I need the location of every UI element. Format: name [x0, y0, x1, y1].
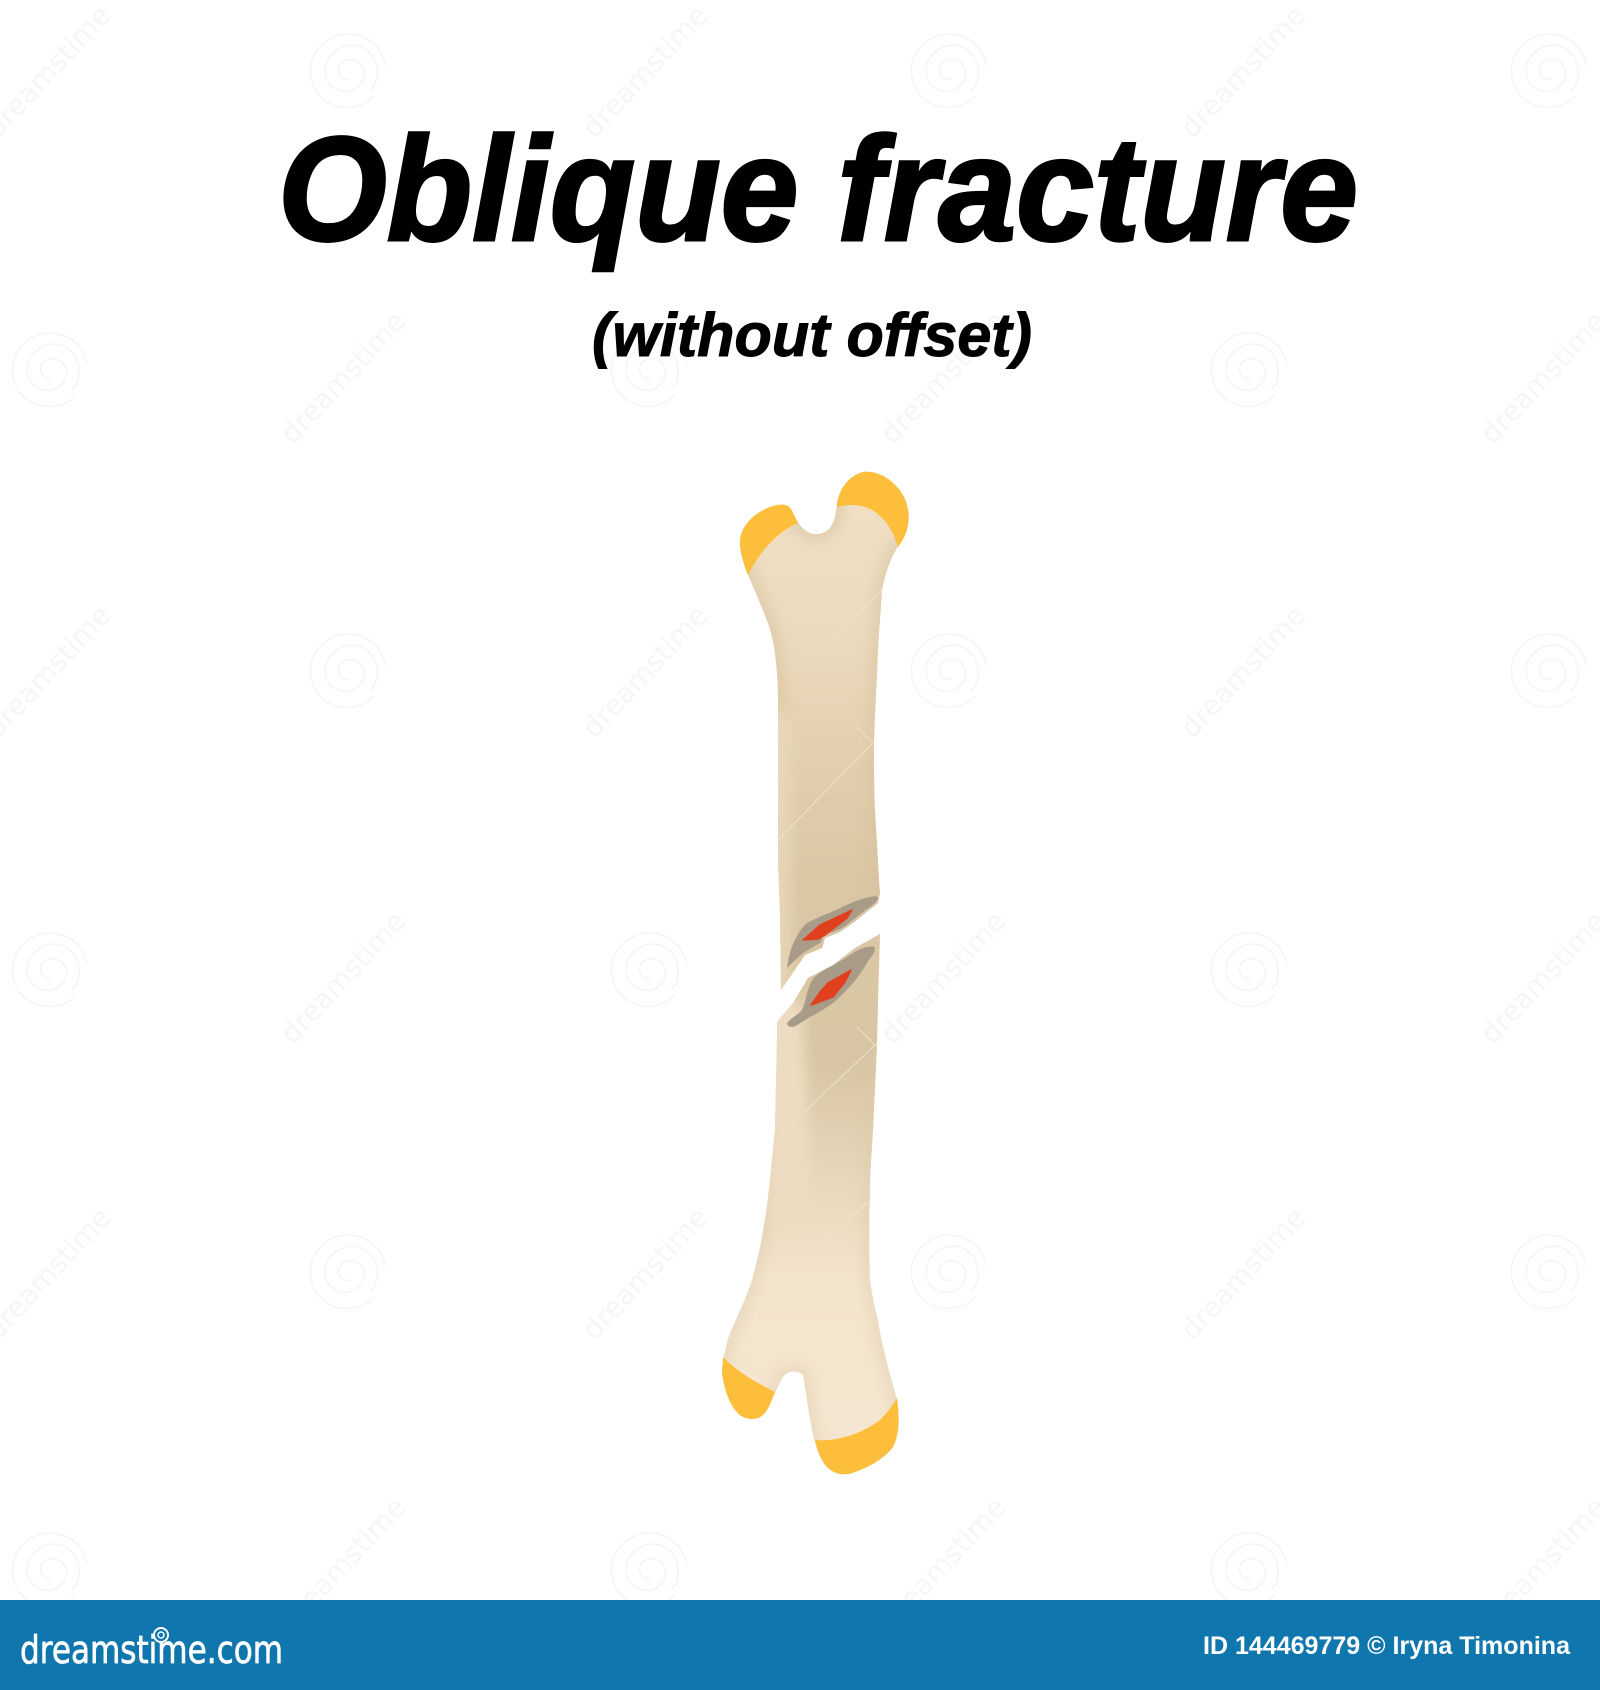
watermark pattern: dreamstime	[874, 305, 1012, 450]
upper fracture surface	[787, 896, 878, 968]
watermark pattern: dreamstime	[274, 905, 412, 1050]
watermark pattern: dreamstime	[874, 905, 1012, 1050]
upper bone fragment	[740, 472, 909, 1000]
watermark pattern: dreamstime	[874, 1491, 1012, 1636]
lower fracture surface	[787, 946, 875, 1027]
image id and credit: ID 144469779 © Iryna Timonina	[1203, 1632, 1571, 1660]
watermark pattern: dreamstime	[274, 1491, 412, 1636]
cartilage: upper left	[740, 505, 798, 575]
lower bone fragment	[722, 934, 899, 1474]
watermark pattern: dreamstime	[1174, 0, 1312, 144]
upper exposed marrow	[803, 910, 852, 940]
lower exposed marrow	[811, 970, 851, 1005]
subtitle: (without offset)	[592, 301, 1032, 369]
footer banner	[0, 1600, 1600, 1690]
watermark pattern: dreamstime	[576, 599, 714, 744]
illustration: fractured femur	[722, 472, 909, 1474]
cartilage: lower right	[815, 1398, 899, 1474]
title: Oblique fracture	[278, 107, 1358, 272]
footer logo: dreamstime.com	[20, 1628, 283, 1672]
watermark pattern: dreamstime	[274, 305, 412, 450]
watermark pattern: dreamstime	[576, 0, 714, 144]
watermark pattern: dreamstime	[1174, 599, 1312, 744]
cartilage: lower left	[722, 1357, 775, 1419]
cartilage: upper right	[837, 472, 909, 547]
watermark pattern: dreamstime	[1174, 1201, 1312, 1346]
watermark lines over bone	[730, 590, 882, 1377]
watermark pattern: dreamstime	[576, 1201, 714, 1346]
